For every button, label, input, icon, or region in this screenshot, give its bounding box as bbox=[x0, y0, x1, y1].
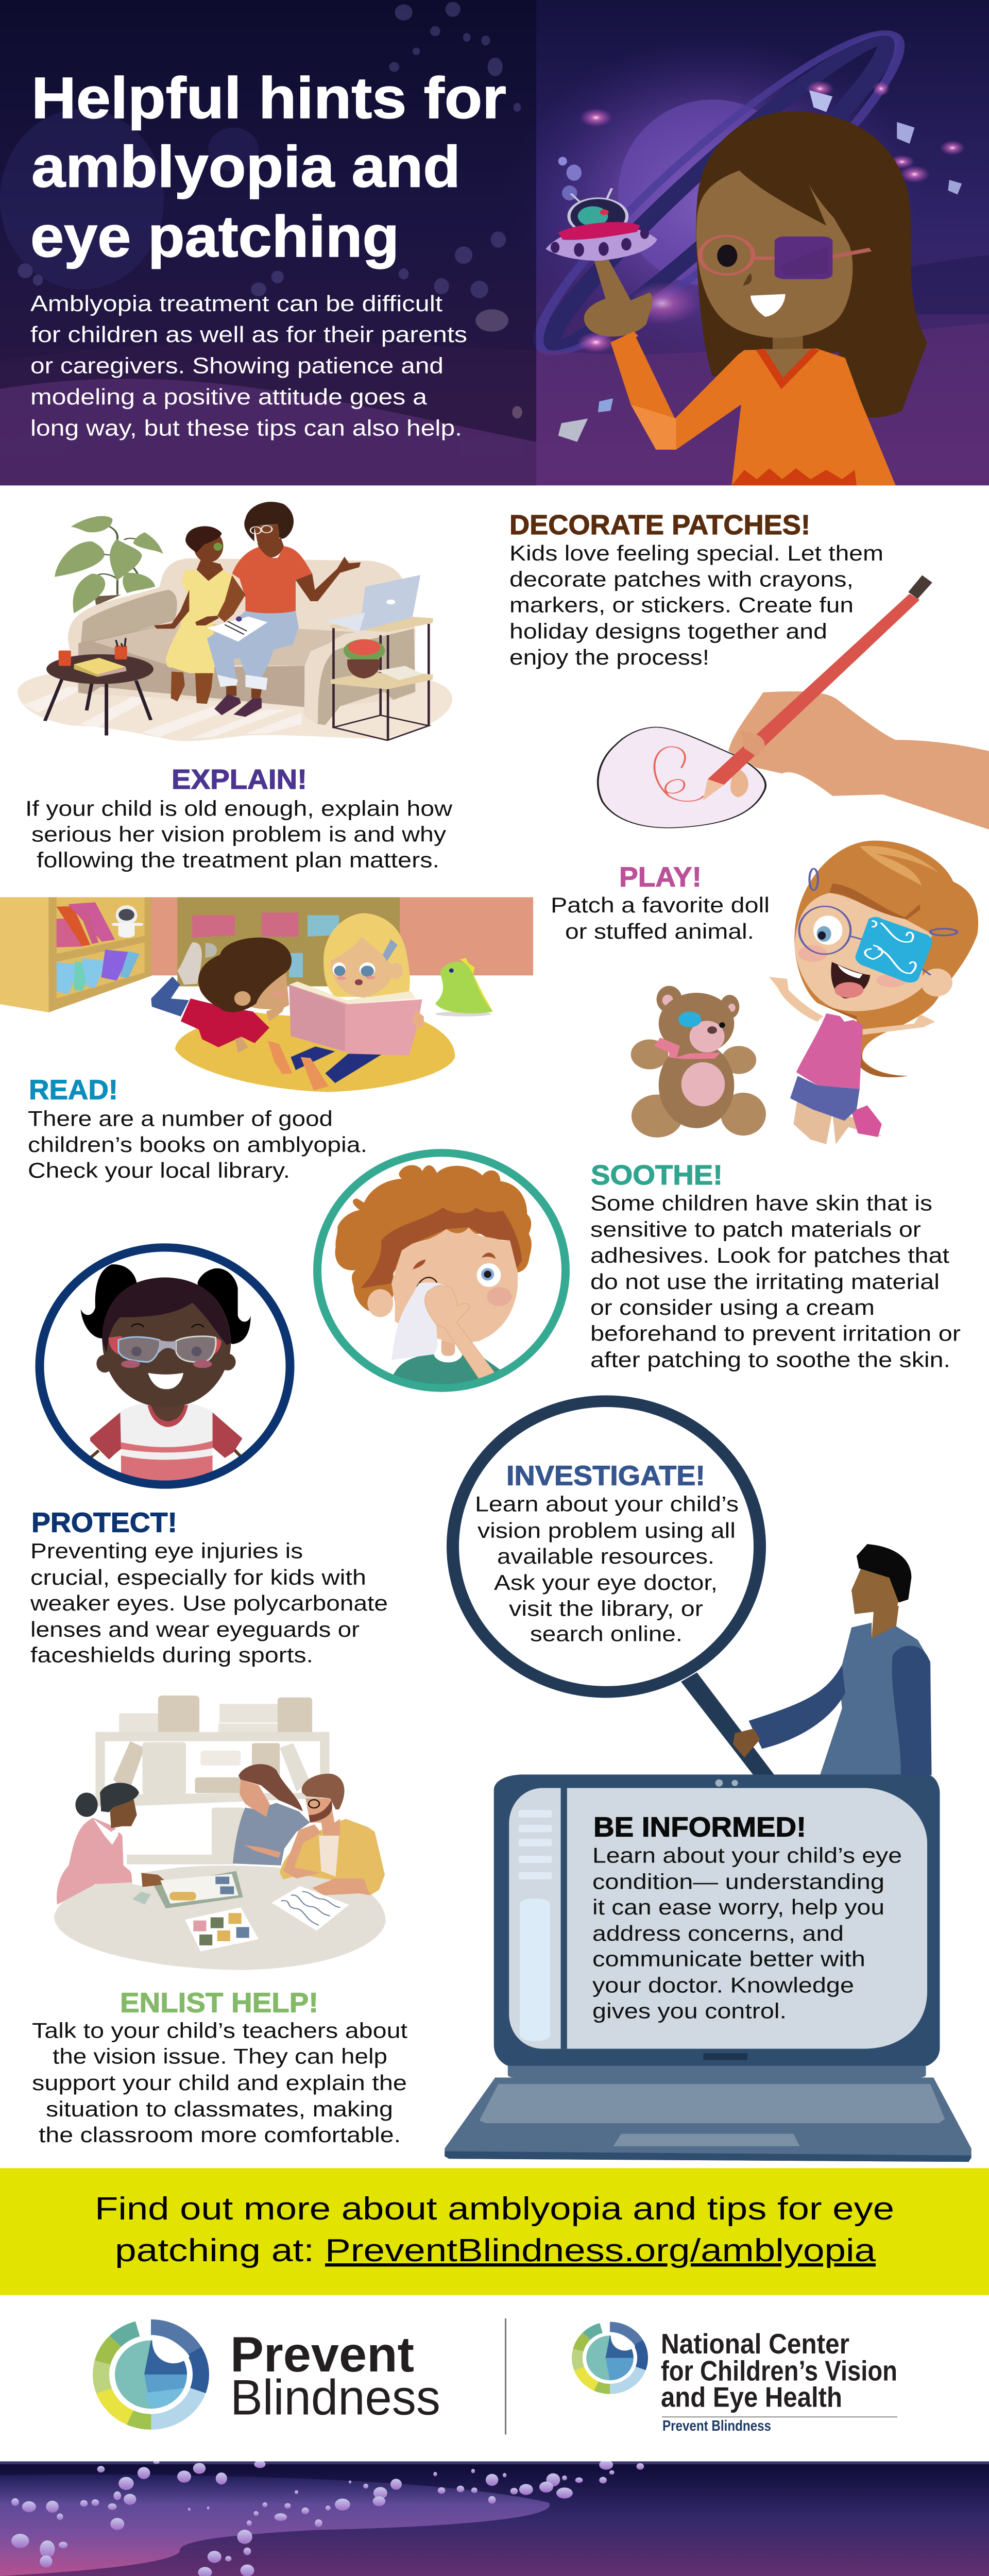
dark haired child bbox=[151, 938, 292, 1053]
text block: play: Patch a favorite doll bbox=[551, 893, 770, 918]
glasses and eye bbox=[813, 916, 842, 945]
text block: protect: weaker eyes. Use polycarbonate bbox=[30, 1591, 388, 1616]
text block: soothe: adhesives. Look for patches that bbox=[590, 1244, 949, 1267]
text block: intro: Amblyopia treatment can be difficult bbox=[30, 291, 443, 316]
logo: Prevent Blindness bbox=[101, 2327, 440, 2426]
illustration: laptop bbox=[445, 1774, 971, 2162]
bookshelf bbox=[95, 1696, 329, 1865]
woman in grey bbox=[233, 1764, 310, 1866]
heading: play: PLAY! bbox=[619, 861, 702, 892]
text block: play: or stuffed animal. bbox=[565, 920, 754, 944]
text: center name bbox=[661, 2328, 897, 2413]
heading: explain: EXPLAIN! bbox=[172, 764, 307, 795]
text: center name: National Center bbox=[661, 2328, 849, 2360]
text block: be informed bbox=[592, 1844, 902, 2023]
text block: investigate: visit the library, or bbox=[509, 1597, 703, 1621]
text block: be informed: Learn about your child’s eye bbox=[592, 1844, 902, 1868]
eye patch bbox=[856, 917, 932, 982]
beanbag bbox=[175, 1012, 455, 1092]
coffee table bbox=[45, 638, 154, 736]
heading: protect: PROTECT! bbox=[31, 1507, 177, 1538]
icon: eye ring bbox=[101, 2327, 201, 2422]
text block: read: There are a number of good bbox=[28, 1107, 333, 1131]
text: Prevent Blindness small: Prevent Blindness bbox=[662, 2418, 771, 2434]
man in yellow bbox=[280, 1774, 385, 1895]
heading: main title bbox=[30, 65, 506, 269]
icon: eye ring bbox=[577, 2327, 643, 2389]
text block: decorate patches: decorate patches with crayons, bbox=[509, 567, 854, 591]
illustration: girl with eyeguards in blue circle bbox=[40, 1247, 290, 1486]
jeans and shoes bbox=[268, 1041, 383, 1090]
skirt bbox=[790, 1076, 860, 1121]
illustration: swoosh and bubbles bbox=[0, 2460, 644, 2576]
text block: be informed: address concerns, and bbox=[592, 1922, 844, 1946]
text block: enlist help: support your child and explain the bbox=[32, 2071, 407, 2095]
heading: decorate patches: DECORATE PATCHES! bbox=[509, 509, 810, 540]
illustration: classroom shelf and table bbox=[54, 1696, 385, 1970]
open book bbox=[289, 981, 424, 1056]
text block: soothe: or consider using a cream bbox=[590, 1296, 875, 1320]
heading: main title: eye patching bbox=[30, 204, 399, 269]
illustration: patched kid and teddy bear bbox=[631, 841, 978, 1144]
text block: play bbox=[551, 893, 770, 944]
mouth bbox=[831, 962, 870, 998]
text block: explain bbox=[25, 796, 453, 872]
text block: explain: If your child is old enough, explain how bbox=[25, 796, 453, 821]
text: call to action: Find out more about amblyopia and tips for eye bbox=[95, 2190, 894, 2226]
text block: enlist help: the vision issue. They can help bbox=[53, 2045, 387, 2069]
text block: be informed: gives you control. bbox=[592, 1999, 787, 2023]
ring bbox=[317, 1153, 566, 1388]
text block: decorate patches: markers, or stickers. Create fun bbox=[509, 593, 854, 617]
panel: call to action band bbox=[0, 2168, 989, 2295]
illustration: bubbles behind title bbox=[0, 2, 536, 485]
text block: enlist help: situation to classmates, making bbox=[46, 2097, 393, 2122]
dinosaur toy bbox=[435, 957, 493, 1016]
text: call to action link: PreventBlindness.org/amblyopia bbox=[325, 2232, 876, 2268]
table bbox=[54, 1866, 385, 1970]
text: center name: for Children’s Vision bbox=[661, 2355, 897, 2386]
text block: be informed: condition— understanding bbox=[592, 1870, 884, 1894]
face bbox=[921, 969, 952, 996]
illustration: girl pointing at UFO bbox=[545, 111, 927, 485]
heading: main title: amblyopia and bbox=[31, 134, 461, 199]
side table bbox=[325, 575, 433, 740]
text block: read: Check your local library. bbox=[28, 1159, 290, 1183]
text block: intro: for children as well as for their parents bbox=[30, 322, 467, 347]
text block: investigate: vision problem using all bbox=[478, 1519, 736, 1543]
text block: soothe: after patching to soothe the skin. bbox=[590, 1348, 950, 1372]
text block: decorate patches: enjoy the process! bbox=[509, 646, 709, 669]
panel: footer space band bbox=[0, 2460, 989, 2576]
text block: investigate: Learn about your child’s bbox=[475, 1493, 739, 1516]
ring bbox=[40, 1247, 290, 1485]
arms bbox=[769, 977, 823, 1022]
logo: National Center for Children's Vision and Eye Health bbox=[577, 2327, 897, 2434]
text block: investigate: search online. bbox=[530, 1622, 683, 1646]
text block: soothe bbox=[590, 1191, 961, 1372]
room backdrop bbox=[0, 897, 533, 986]
text block: decorate patches: Kids love feeling special. Let them bbox=[509, 541, 883, 566]
illustration: parent and child on sofa bbox=[18, 502, 452, 741]
text: center name: and Eye Health bbox=[661, 2381, 842, 2413]
text block: soothe: do not use the irritating material bbox=[590, 1270, 940, 1294]
book and papers bbox=[132, 1871, 349, 1952]
text block: protect: Preventing eye injuries is bbox=[30, 1539, 303, 1563]
teddy and child bbox=[631, 841, 978, 1138]
text block: intro: modeling a positive attitude goes a bbox=[30, 384, 427, 410]
plant bbox=[55, 516, 163, 613]
text block: be informed: it can ease worry, help you bbox=[592, 1895, 884, 1920]
rug bbox=[18, 673, 452, 741]
text: Prevent: Prevent bbox=[230, 2327, 414, 2383]
panel: header space scene bbox=[0, 0, 989, 488]
heading: be informed: BE INFORMED! bbox=[593, 1811, 806, 1842]
woman in pink bbox=[57, 1783, 169, 1905]
text block: protect bbox=[30, 1539, 388, 1667]
text: Blindness: Blindness bbox=[230, 2370, 440, 2426]
text: call to action lead-in: patching at: bbox=[115, 2232, 314, 2268]
hair bbox=[794, 841, 978, 1077]
overlay: dark left panel bbox=[0, 0, 536, 485]
text block: investigate: Ask your eye doctor, bbox=[494, 1571, 718, 1595]
illustration: hand decorating patch with pencil bbox=[598, 575, 989, 829]
parent bbox=[195, 502, 361, 717]
text block: investigate: available resources. bbox=[497, 1545, 714, 1569]
heading: investigate: INVESTIGATE! bbox=[506, 1460, 705, 1491]
text block: protect: crucial, especially for kids with bbox=[30, 1566, 366, 1589]
bookcase bbox=[0, 897, 152, 1012]
text block: be informed: your doctor. Knowledge bbox=[592, 1973, 854, 1997]
text block: intro: or caregivers. Showing patience and bbox=[30, 353, 444, 378]
illustration: ringed planet nebula bbox=[0, 19, 989, 488]
legs and shoes bbox=[793, 1096, 882, 1144]
dress bbox=[796, 1013, 863, 1089]
blonde child bbox=[323, 913, 410, 998]
text block: soothe: sensitive to patch materials or bbox=[590, 1218, 921, 1242]
text block: read bbox=[28, 1107, 367, 1183]
text block: soothe: Some children have skin that is bbox=[590, 1191, 932, 1215]
text block: explain: following the treatment plan matters. bbox=[37, 849, 439, 872]
text block: protect: lenses and wear eyeguards or bbox=[30, 1618, 360, 1642]
heading: main title: Helpful hints for bbox=[31, 65, 506, 130]
text block: explain: serious her vision problem is and why bbox=[31, 823, 447, 846]
text block: soothe: beforehand to prevent irritation or bbox=[590, 1321, 961, 1346]
teddy bear bbox=[631, 986, 766, 1138]
text block: decorate patches bbox=[509, 541, 883, 669]
text block: enlist help bbox=[32, 2019, 407, 2147]
text block: investigate bbox=[475, 1493, 739, 1646]
sofa bbox=[68, 558, 415, 725]
heading: soothe: SOOTHE! bbox=[591, 1160, 723, 1191]
text block: enlist help: Talk to your child’s teachers about bbox=[32, 2019, 407, 2043]
text block: be informed: communicate better with bbox=[592, 1947, 865, 1971]
robot bbox=[112, 905, 143, 938]
text block: protect: faceshields during sports. bbox=[30, 1643, 313, 1667]
text block: enlist help: the classroom more comfortable. bbox=[39, 2123, 401, 2147]
text block: read: children’s books on amblyopia. bbox=[28, 1133, 367, 1157]
text block: decorate patches: holiday designs together and bbox=[509, 620, 827, 643]
text block: intro: long way, but these tips can also help. bbox=[30, 416, 462, 440]
heading: enlist help: ENLIST HELP! bbox=[120, 1987, 318, 2018]
illustration: man holding magnifying glass bbox=[733, 1544, 932, 1775]
illustration: children reading bbox=[0, 897, 533, 1092]
heading: read: READ! bbox=[29, 1074, 118, 1105]
illustration: magnifying glass bbox=[453, 1401, 775, 1775]
illustration: boy with tissue in teal circle bbox=[317, 1153, 566, 1389]
child bbox=[154, 526, 235, 704]
text block: intro bbox=[30, 291, 467, 440]
